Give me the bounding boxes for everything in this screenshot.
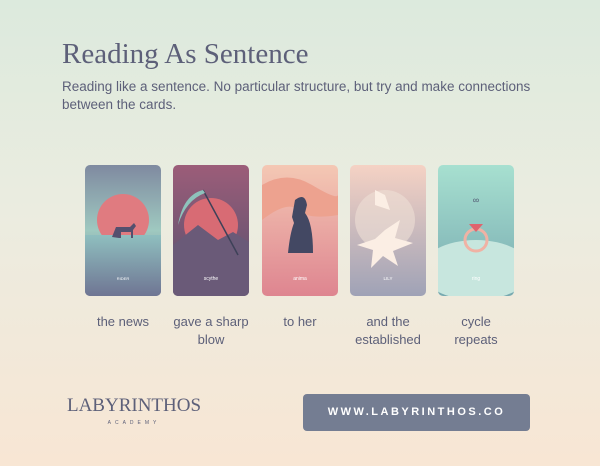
card: ring: ∞ — [473, 195, 479, 205]
text: the news — [97, 314, 149, 329]
cards — [85, 165, 514, 296]
card: anima: anima — [293, 276, 307, 282]
card: lily: LILY — [384, 276, 392, 281]
card: scythe: scythe — [204, 276, 218, 282]
card: ring: ring — [472, 276, 480, 282]
logo — [67, 395, 201, 426]
card: rider — [85, 165, 161, 296]
text: gave a sharp blow — [173, 314, 249, 347]
text: and the established — [355, 314, 421, 347]
title: Reading As Sentence — [62, 38, 308, 70]
logo: ACADEMY — [108, 420, 160, 426]
card: ring — [438, 165, 514, 296]
button: website: WWW.LABYRINTHOS.CO — [328, 406, 505, 418]
card: scythe — [173, 165, 249, 296]
subtitle: Reading like a sentence. No particular structure, but try and make connections between the cards. — [62, 79, 530, 112]
card: anima — [262, 165, 338, 296]
card: rider: RIDER — [117, 276, 129, 281]
card: lily — [350, 165, 426, 296]
captions — [97, 314, 498, 347]
text: cycle repeats — [454, 314, 498, 347]
logo: LABYRINTHOS — [67, 395, 201, 416]
button: website — [303, 394, 530, 431]
text: to her — [283, 314, 317, 329]
